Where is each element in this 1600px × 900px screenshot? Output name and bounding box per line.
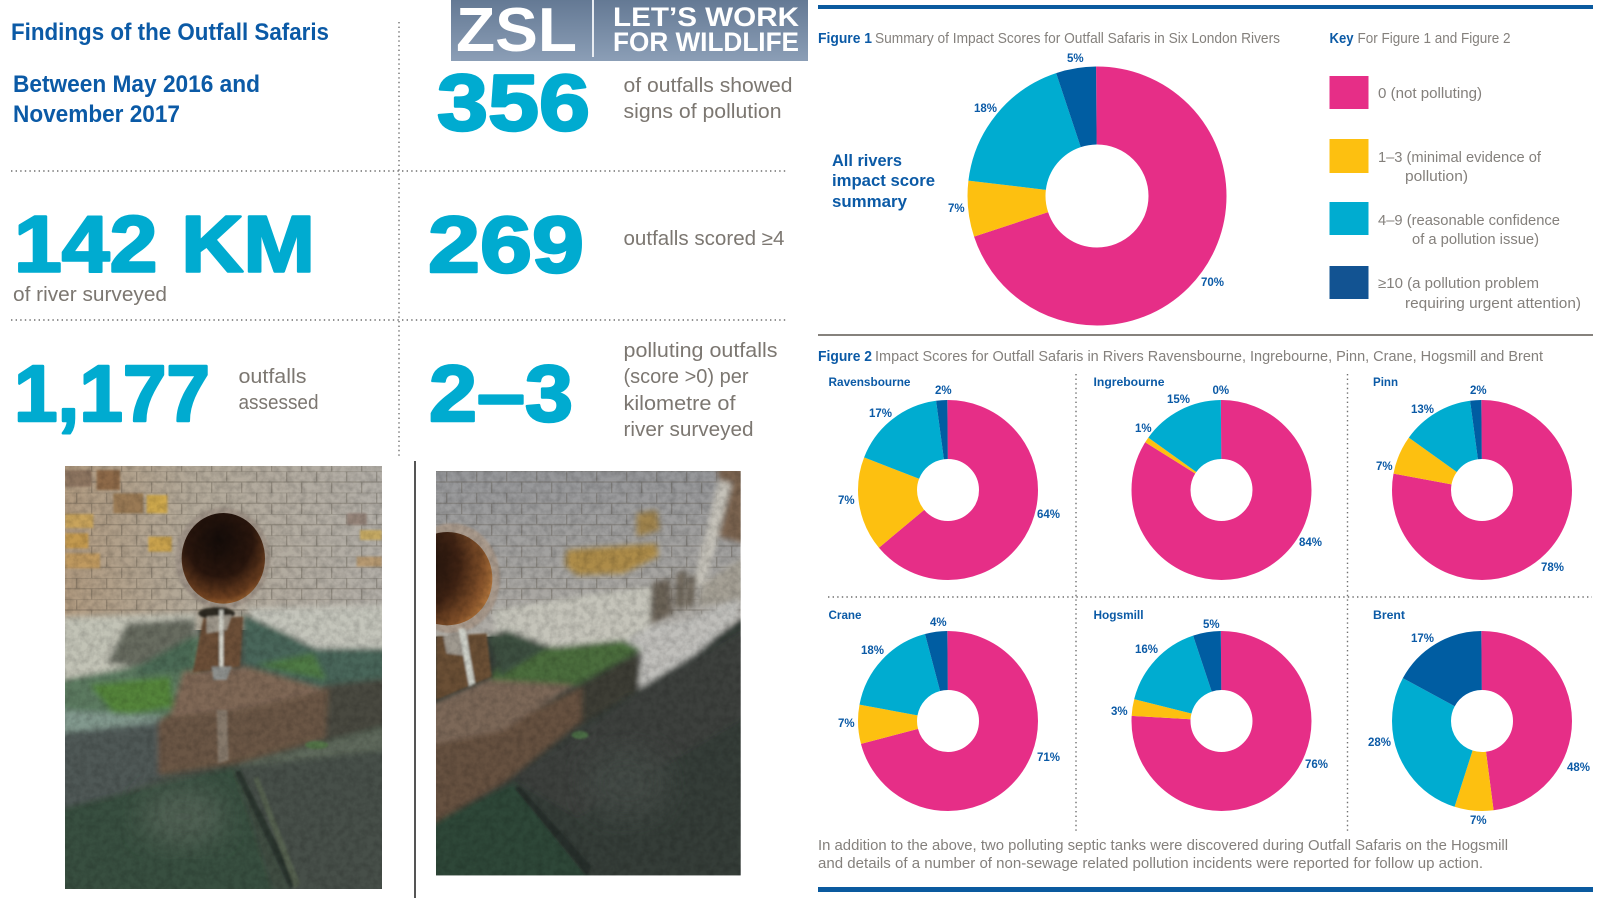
donut: Crane [828, 608, 1060, 782]
figure 1 heading: Summary of Impact Scores for Outfall Safaris in Six London Rivers [875, 30, 1280, 47]
key: pollution) [1405, 169, 1468, 185]
stat: 2–3 polluting outfalls per km: 2–3 [429, 349, 573, 438]
stat: 2–3 polluting outfalls per km: (score >0) per [624, 366, 749, 388]
stat: 2–3 polluting outfalls per km: river surveyed [624, 419, 754, 441]
ZSL logo banner [451, 0, 808, 65]
donut: Brent: Brent [1373, 608, 1405, 622]
figure 1 heading: Figure 1 [818, 30, 872, 47]
stat: 356 outfalls showed pollution: signs of pollution [624, 101, 782, 123]
donut: Crane: 7% [838, 718, 855, 730]
donut: Ingrebourne: 84% [1299, 537, 1322, 549]
footnote text: and details of a number of non-sewage related pollution incidents were reported for follow up action. [818, 855, 1483, 872]
donut: Ravensbourne [828, 375, 1060, 550]
stat: 1,177 outfalls assessed: 1,177 [14, 349, 210, 438]
donut: Crane: Crane [828, 608, 862, 622]
donut: Brent: 17% [1411, 633, 1434, 645]
stat: 356 outfalls showed pollution [437, 58, 792, 147]
all rivers label [832, 151, 935, 211]
key: 0 (not polluting) [1378, 86, 1482, 102]
donut: Pinn: 13% [1411, 404, 1434, 416]
key: For Figure 1 and Figure 2 [1358, 30, 1510, 47]
bottom rule [818, 887, 1593, 892]
key: ≥10 (a pollution problem [1378, 276, 1539, 292]
all rivers label: impact score [832, 171, 935, 190]
donut: Hogsmill: 3% [1111, 706, 1128, 718]
key: of a pollution issue) [1412, 232, 1539, 248]
stat: 2–3 polluting outfalls per km: polluting outfalls [624, 340, 778, 362]
key: requiring urgent attention) [1405, 296, 1581, 312]
donut: Ravensbourne: 64% [1037, 509, 1060, 521]
key: 1–3 (minimal evidence of [1378, 150, 1542, 166]
stat: 1,177 outfalls assessed: outfalls [238, 366, 306, 388]
subtitle: date range [13, 71, 260, 128]
figure 2 heading: Figure 2 [818, 348, 872, 365]
donut: all rivers [948, 53, 1224, 289]
donut: all rivers: 7% [948, 203, 965, 215]
dotted grid dividers [11, 22, 787, 458]
stat: 142 KM of river surveyed: of river surveyed [13, 284, 167, 306]
ZSL logo banner: LET’S WORK [613, 2, 800, 32]
donut: Ingrebourne: 1% [1135, 423, 1152, 435]
stat: 269 outfalls scored 4 or more: 269 [428, 200, 584, 289]
donut: Hogsmill [1094, 608, 1328, 782]
photo: outfall pipe front view [60, 466, 387, 893]
donut: Crane: 71% [1037, 752, 1060, 764]
donut: Ingrebourne [1094, 375, 1322, 550]
stat: 356 outfalls showed pollution: of outfalls showed [624, 75, 792, 97]
stat: 269 outfalls scored 4 or more [428, 200, 784, 289]
figure 2 dotted dividers [828, 374, 1592, 831]
stat: 142 KM of river surveyed: 142 KM [14, 200, 315, 288]
ZSL logo banner: FOR WILDLIFE [613, 27, 799, 57]
donut: Crane: 4% [930, 617, 947, 629]
donut: Hogsmill: 5% [1203, 619, 1220, 631]
footnote text [818, 837, 1508, 872]
key: Key [1330, 30, 1354, 47]
donut: all rivers: 5% [1067, 53, 1084, 65]
title: Findings of the Outfall Safaris [11, 19, 329, 46]
subtitle: date range: Between May 2016 and [13, 71, 260, 98]
all rivers label: summary [832, 192, 908, 211]
donut: Pinn: 78% [1541, 562, 1564, 574]
donut: Brent [1368, 608, 1590, 827]
donut: Ravensbourne: 7% [838, 495, 855, 507]
donut: Pinn: Pinn [1373, 375, 1398, 389]
donut: Crane: 18% [861, 645, 884, 657]
middle rule [818, 334, 1593, 336]
stat: 1,177 outfalls assessed [14, 349, 318, 438]
donut: Pinn: 7% [1376, 461, 1393, 473]
donut: Brent: 28% [1368, 737, 1391, 749]
donut: Brent: 48% [1567, 762, 1590, 774]
donut: Hogsmill: Hogsmill [1094, 608, 1144, 622]
key: 4–9 (reasonable confidence [1378, 213, 1560, 229]
subtitle: date range: November 2017 [13, 101, 180, 128]
key [1330, 30, 1581, 312]
donut: all rivers: 18% [974, 103, 997, 115]
divider between photos [414, 461, 416, 898]
donut: Ravensbourne: Ravensbourne [828, 375, 911, 389]
photo: outfall pipe side view [436, 471, 741, 876]
donut: Hogsmill: 76% [1305, 759, 1328, 771]
top rule right column [818, 5, 1593, 9]
donut: Brent: 7% [1470, 815, 1487, 827]
stat: 269 outfalls scored 4 or more: outfalls scored ≥4 [624, 228, 784, 250]
footnote text: In addition to the above, two polluting septic tanks were discovered during Outfall Safaris on the Hogsmill [818, 837, 1508, 854]
donut: Ravensbourne: 2% [935, 385, 952, 397]
stat: 2–3 polluting outfalls per km [429, 340, 778, 441]
stat: 2–3 polluting outfalls per km: kilometre of [624, 393, 736, 415]
donut: Hogsmill: 16% [1135, 644, 1158, 656]
donut: Ingrebourne: 15% [1167, 394, 1190, 406]
donut: Ingrebourne: 0% [1212, 385, 1229, 397]
all rivers label: All rivers [832, 151, 902, 170]
stat: 356 outfalls showed pollution: 356 [437, 58, 590, 147]
donut: Pinn [1373, 375, 1564, 574]
stat: 1,177 outfalls assessed: assessed [238, 392, 318, 414]
donut: Pinn: 2% [1470, 385, 1487, 397]
figure 2 heading: Impact Scores for Outfall Safaris in Rivers Ravensbourne, Ingrebourne, Pinn, Crane, Hogsmill and Brent [875, 348, 1544, 365]
donut: Ravensbourne: 17% [869, 408, 892, 420]
donut: all rivers: 70% [1201, 277, 1224, 289]
donut: Ingrebourne: Ingrebourne [1094, 375, 1165, 389]
